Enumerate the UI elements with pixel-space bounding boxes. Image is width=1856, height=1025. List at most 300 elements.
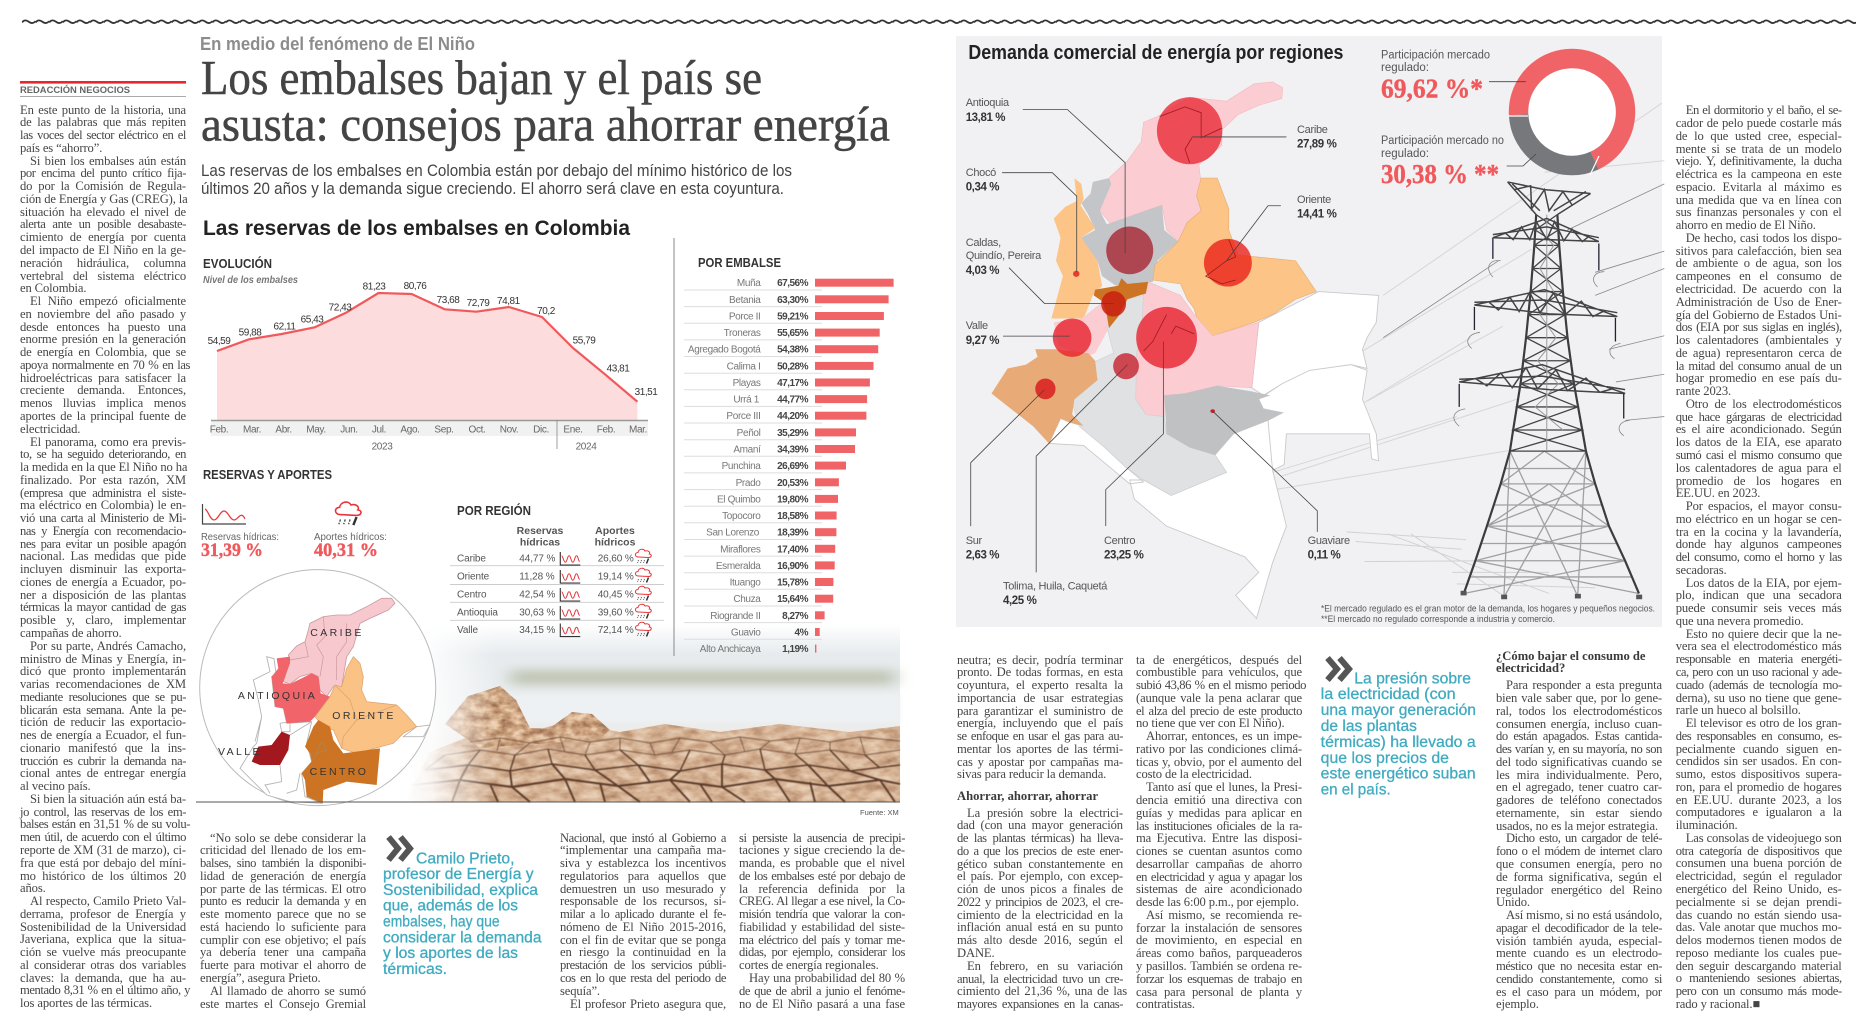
text column 6: desde las 6:00 p.m., por ejemplo. (1136, 895, 1299, 909)
text column 8: plo, indican que una secadora (1676, 588, 1842, 602)
section heading: reservas: Las reservas de los embalses en Colombia (203, 217, 630, 240)
text column 6: las instituciones oficiales de la ra- (1136, 819, 1302, 833)
text column 1: ner a disposición de las plantas (20, 588, 186, 602)
text column 2: está haciendo lo suficiente para (200, 920, 366, 934)
month labels: May. (306, 424, 326, 436)
callout: Camilo Prieto: profesor de Energía y (383, 866, 534, 883)
text column 1: alerta ante un posible desabaste- (20, 217, 186, 231)
text column 8: que hace gárgaras de electricidad (1676, 410, 1842, 424)
bar chart: por embalse: 17,40% (777, 544, 809, 555)
text column 1: Sostenibilidad de la Universidad (20, 920, 186, 934)
month labels (210, 424, 647, 452)
text column 8: iluminación. (1676, 818, 1738, 832)
callout: presión sobre la electricidad: una mayor generación (1321, 702, 1476, 719)
map: Colombia demand (971, 82, 1379, 618)
chart: evolución (203, 256, 658, 452)
text column 8: computadores e igualaron a la (1676, 805, 1842, 819)
text column 5 continued: La presión sobre la electrici- (967, 806, 1123, 820)
text column 6: áreas como baños, parqueaderos (1136, 946, 1302, 960)
map labels: CENTRO (310, 766, 368, 778)
table: por región: 72,14 % (598, 625, 634, 636)
map labels: Centro (1104, 535, 1135, 547)
byline: REDACCIÓN NEGOCIOS (20, 84, 130, 96)
text column 5 continued: do a que los precios de este ener- (957, 844, 1123, 858)
bar chart: por embalse: Ituango (730, 578, 761, 588)
text column 1: neración hidráulica, columna (20, 256, 186, 270)
stat: aportes hídricos: 40,31 % (314, 540, 378, 561)
text column 5: se enfoque en usar el gas para au- (957, 729, 1123, 743)
text column 1: las voces del sector eléctrico en el (20, 128, 186, 142)
text column 8: pecialmente cuando siguen en- (1676, 742, 1842, 756)
text column 1: cional antes de entregar energía (20, 766, 186, 780)
text column 3: demuestren un uso mesurado y (560, 882, 726, 896)
text column 7: apagar el decodificador de la tele- (1496, 921, 1662, 935)
month labels: Feb. (210, 424, 228, 436)
subheading: Cómo bajar el consumo (1496, 649, 1646, 675)
text column 7: fono o el módem de internet claro (1496, 844, 1662, 858)
callout: presión sobre la electricidad: la electricidad (con (1321, 686, 1456, 703)
text column 8: los calentadores (ambientales y (1676, 333, 1842, 347)
text column 4: si persiste la ausencia de precipi- (739, 831, 905, 845)
text column 1: mo histórico de los últimos 20 (20, 869, 186, 883)
table: por región: 44,77 % (519, 554, 556, 565)
text column 8: del consumo, como el horno y las (1676, 550, 1842, 564)
text column 3: cos en lo que resta del periodo de (560, 971, 726, 985)
text column 2: punto es reducir la demanda y en (200, 894, 366, 908)
region: Oriente (315, 657, 417, 753)
text column 1: claves: la demanda, que ha au- (20, 971, 186, 985)
region: Guaviare (1164, 386, 1283, 455)
mast (1464, 215, 1639, 593)
table columns: Reservas (517, 525, 564, 537)
stat: aportes hídricos (314, 531, 387, 561)
text column 8: das. Vale anotar que muchos mo- (1676, 920, 1842, 934)
text column 8: consumen una buena porción de (1676, 856, 1842, 870)
callout: Camilo Prieto (383, 837, 542, 978)
icon: chevrons (1328, 658, 1349, 680)
table columns: Aportes (595, 525, 635, 537)
text column 4: de los embalses esté por debajo de (739, 869, 905, 883)
text column 1: ción de Energía y Gas (CREG), la (20, 192, 188, 206)
text column 6 (1136, 653, 1306, 1011)
bar chart: por embalse: 47,17% (777, 378, 809, 389)
bar chart: por embalse: Chuza (733, 594, 761, 605)
map labels: 4,03 % (966, 265, 999, 277)
subtitle (201, 162, 792, 198)
region: Valle (252, 732, 290, 765)
text column 4: manda, es probable que el nivel (739, 856, 905, 870)
text column 3: regulatorios para aquellos que (560, 869, 726, 883)
text column 8: gía del Gobierno de Estados Uni- (1676, 308, 1842, 322)
text column 6: ticas y, obvio, por el aumento del (1136, 755, 1302, 769)
text column 8: ca, pero con un uso racional y ade- (1676, 665, 1842, 679)
bar chart: por embalse: Punchina (722, 461, 761, 472)
text column 8: electricidad, según el regulador (1676, 869, 1842, 883)
table columns: hídricas (520, 537, 560, 549)
unregulated market share (1381, 135, 1504, 189)
text column 5 continued: ción de unos picos a finales de (957, 882, 1123, 896)
bar chart: por embalse: 8,27% (782, 611, 809, 622)
data labels: 62,11 (273, 322, 296, 332)
bar chart: por embalse: 54,38% (777, 345, 809, 356)
data labels: 31,51 (635, 387, 658, 398)
text column 1: creciente demanda. Entonces, (20, 383, 186, 397)
text column 1: mediante resoluciones que se pu- (20, 690, 186, 704)
month labels: 2023 (372, 442, 393, 452)
month labels: Ago. (400, 424, 420, 436)
text column 1: Si bien la situación aún está ba- (30, 792, 186, 806)
kicker: En medio del fenómeno de El Niño (200, 34, 475, 54)
map labels: ORIENTE (332, 710, 396, 722)
text column 1: electricidad. (20, 422, 80, 436)
bar chart: por embalse: Betania (729, 295, 761, 306)
text column 3 (560, 831, 726, 1011)
bar chart: por embalse: 4% (795, 628, 809, 638)
map labels (218, 627, 396, 778)
bar chart: por embalse (684, 256, 894, 655)
text column 4: cortes de energía regionales. (739, 958, 879, 972)
text column 8: tra en la cocina y la lavandería, (1676, 525, 1842, 539)
text column 4: ma eléctrico del país y tomar me- (739, 933, 905, 947)
white departments (240, 657, 430, 803)
footnotes (1321, 604, 1655, 624)
text column 8: espacio. Evitarla al máximo es (1676, 180, 1842, 194)
text column 1: país es “ahorro”. (20, 141, 102, 155)
bar chart: por embalse: 18,39% (777, 528, 809, 539)
map labels: Antioquia (966, 97, 1010, 109)
text column 6: forzar los esquemas de trabajo en (1136, 972, 1302, 986)
text column 1: cionario manifestó que la ins- (20, 741, 186, 755)
text column 1: jo control, las reservas de los em- (20, 805, 186, 819)
regulated market share: Participación mercado (1381, 49, 1490, 61)
text column 8: en EE.UU. durante 2023, a los (1676, 793, 1842, 807)
text column 1: vertebral del sistema eléctrico (20, 269, 186, 283)
text column 2: balses, sino también la disponibi- (200, 856, 366, 870)
top wavy rule (22, 17, 1856, 27)
text column 4: didas, por ejemplo, considerar los (739, 945, 905, 959)
white departments (1049, 292, 1379, 618)
text column 1: varias recomendaciones de XM (20, 677, 186, 691)
data labels: 73,68 (437, 295, 460, 306)
data labels: 43,81 (607, 364, 630, 374)
text column 7: Dicho esto, un cargador de telé- (1506, 831, 1662, 845)
footnotes: *El mercado regulado es el gran motor de la demanda, los hogares y pequeños negocios. (1321, 604, 1655, 614)
bar chart: por embalse: Agregado Bogotá (688, 345, 761, 356)
text column 1: menos lluvias implica menos (20, 396, 186, 410)
text column 8: De hecho, casi todos los dispo- (1686, 231, 1842, 245)
text column 1: reporte de XM (31 de marzo), ci- (20, 843, 186, 857)
text column 5 continued: 2022 y principios de 2023, el cre- (957, 895, 1123, 909)
table: por región: Oriente (457, 572, 490, 583)
text column 2 (200, 831, 366, 1011)
callout: Camilo Prieto: térmicas. (383, 961, 447, 978)
bar chart: por embalse: Alto Anchicaya (700, 644, 761, 655)
text column 3: El profesor Prieto asegura que, (570, 997, 726, 1011)
table: por región: 39,60 % (598, 608, 634, 619)
callout: presión sobre la electricidad: que los precios de (1321, 750, 1449, 767)
text column 7 (1496, 678, 1662, 1011)
text column 6: el alza del precio de este producto (1136, 704, 1302, 718)
map labels: Chocó (966, 167, 996, 179)
text column 5 continued: inflación anual está en su punto (957, 920, 1123, 934)
text column 1: nes de energía a Ecuador, el fun- (20, 728, 186, 742)
text column 1: incluyen disminuir las exporta- (20, 562, 186, 576)
text column 8: eléctrica es la campeona en este (1676, 167, 1842, 181)
text column 8: cador de pelo puede costarle más (1676, 116, 1842, 130)
table columns: hídricos (595, 537, 636, 549)
text column 7: do están apagados. Estas cantida- (1496, 729, 1662, 743)
region: Antioquia (1081, 178, 1178, 286)
text column 8: viejo. Y, definitivamente, la ducha (1676, 154, 1842, 168)
subtitle: últimos 20 años y la demanda sigue creciendo. El ahorro será clave en esta coyuntura. (201, 180, 784, 198)
text column 8: rante 2023. (1676, 384, 1731, 398)
region: Valle (1054, 302, 1109, 357)
text column 8: ahorro en medio de El Niño. (1676, 218, 1816, 232)
text column 6: Así mismo, se recomienda re- (1146, 908, 1302, 922)
stat: aportes hídricos: Aportes hídricos: (314, 531, 387, 543)
text column 7: mente cuando es un electrodo- (1496, 946, 1662, 960)
demand bubbles (1035, 97, 1252, 413)
text column 6: rativo por las condiciones climá- (1136, 742, 1302, 756)
donut chart (1489, 58, 1626, 175)
text column 8: dos (EIA por sus siglas en inglés), (1676, 320, 1842, 334)
subheading: Cómo bajar el consumo: electricidad? (1496, 661, 1565, 675)
text column 6: Ahorrar, entonces, es un impe- (1146, 729, 1302, 743)
text column 8: sumó casi el mismo consumo que (1676, 448, 1842, 462)
text column 3: “implementar una campaña ma- (560, 843, 726, 857)
bar chart: por embalse: Muña (737, 278, 761, 289)
text column 1: por encima del punto crítico fija- (20, 166, 186, 180)
callout: presión sobre la electricidad: de las plantas (1321, 718, 1417, 735)
bar chart: por embalse: 44,20% (777, 411, 809, 422)
text column 1: blicarán esta semana. Ante la pe- (20, 703, 186, 717)
text column 5: para garantizar el suministro de (957, 704, 1123, 718)
text column 5 (957, 653, 1123, 781)
text column 3: con el fin de evitar que se ponga (560, 933, 726, 947)
text column 1: Por su parte, Andrés Camacho, (30, 639, 186, 653)
text column 8: electricidad. De acuerdo con la (1676, 282, 1842, 296)
bar chart: por embalse: Peñol (737, 428, 761, 439)
text column 5: neutra; es decir, podría terminar (957, 653, 1123, 667)
text column 1: ministro de Minas y Energía, in- (20, 652, 186, 666)
map labels: 0,11 % (1308, 550, 1341, 562)
text column 1: desde entonces ha puesto una (20, 320, 186, 334)
text column 5 continued: más alto desde 2016, según el (957, 933, 1123, 947)
table: por región (450, 503, 664, 637)
text column 5: importancia de usar estrategias (957, 691, 1123, 705)
month labels: 2024 (576, 442, 597, 452)
department borders inside bubbles (1144, 107, 1236, 351)
insulators (1459, 238, 1624, 418)
table: por región: Valle (457, 625, 479, 636)
text column 1: campañas de ahorro. (20, 626, 122, 640)
text column 8: das cuando no están siendo usa- (1676, 908, 1842, 922)
text column 5: cas y apostar por campañas ma- (957, 755, 1123, 769)
region: Antioquia (272, 657, 330, 723)
text column 4: taciones y sigue creciendo la de- (739, 843, 905, 857)
text column 7: visión también ayuda, especial- (1496, 934, 1662, 948)
text column 8: una medida que va en línea con (1676, 193, 1842, 207)
data labels: 70,2 (537, 306, 556, 317)
text column 1: finalizado. Por esta razón, XM (20, 473, 186, 487)
region: Tolima Huila (1072, 295, 1226, 495)
regulated market share: 69,62 %* (1381, 74, 1483, 104)
text column 6: subió 43,86 % en el mismo periodo (1136, 678, 1306, 692)
month labels: Mar. (629, 424, 647, 436)
table: por región: 19,14 % (598, 572, 634, 583)
text column 7: gadores de teléfono conectados (1496, 793, 1662, 807)
text column 3: sequía”. (560, 984, 600, 998)
region: Caribe (283, 598, 395, 697)
icon: rain cloud (336, 502, 361, 525)
callout: presión sobre la electricidad: este energético suban (1321, 766, 1476, 783)
map labels: Oriente (1297, 194, 1331, 206)
map labels: 4,25 % (1003, 595, 1037, 607)
text column 1: enorme presión en la generación (20, 332, 186, 346)
text column 2: “No solo se debe considerar la (210, 831, 366, 845)
text column 1: dicó que pronto implementarán (20, 664, 186, 678)
table heading: POR REGIÓN (457, 503, 531, 518)
callout: Camilo Prieto: embalses, hay que (383, 914, 500, 930)
text column 1: los aportes de las térmicas. (20, 996, 152, 1010)
text column 1: Javeriana, explica que la situa- (20, 932, 186, 946)
text column 5 continued: el país. Por ejemplo, con excep- (957, 869, 1123, 883)
region: Centro pink (1136, 282, 1259, 417)
text column 1: Al respecto, Camilo Prieto Val- (30, 894, 186, 908)
text column 1: El Niño empezó oficialmente (30, 294, 186, 308)
text column 7: usados, no es la mejor estrategia. (1496, 819, 1658, 833)
table: por región: 11,28 % (519, 572, 555, 583)
text column 8: de ambiente o de agua, son los (1676, 256, 1842, 270)
text column 8: cendidos sin ser usados. En con- (1676, 754, 1842, 768)
transmission tower (1346, 182, 1642, 599)
text column 8: sumo, estos dispositivos supera- (1676, 767, 1842, 781)
month labels: Ene. (563, 424, 583, 436)
month labels: Sep. (434, 424, 454, 436)
text column 5: sivas para reducir la demanda. (957, 767, 1106, 781)
map labels: 9,27 % (966, 335, 999, 347)
data labels (208, 281, 658, 398)
text column 6: guías y medidas para aplicar en (1136, 806, 1302, 820)
text column 6: desarrollar campañas de ahorro (1136, 857, 1302, 871)
callout: Camilo Prieto: considerar la demanda (383, 929, 542, 946)
text column 3: nómeno de El Niño 2015-2016, (560, 920, 726, 934)
text column 8: o manteniendo sesiones abiertas, (1676, 971, 1842, 985)
text column 6: dencia emitió una directiva con (1136, 793, 1302, 807)
data labels: 81,23 (363, 282, 386, 292)
bar chart: por embalse: Troneras (724, 328, 761, 339)
data labels: 54,59 (208, 336, 231, 347)
text column 6: combustible para vehículos, que (1136, 665, 1302, 679)
text column 1: derrama, profesor de Energía y (20, 907, 186, 921)
text column 8: des responsables en consumo, es- (1676, 729, 1842, 743)
text column 1: de las palabras que más repiten (20, 115, 186, 129)
text column 7: eternamente, sin estar siendo (1496, 806, 1662, 820)
text column 8: EE.UU. en 2023. (1676, 486, 1760, 500)
month labels: Mar. (243, 424, 261, 436)
month labels: Jul. (372, 424, 386, 436)
text column 2: ya debería tener una campaña (200, 945, 366, 959)
text column 1: al considerar otras dos variables (20, 958, 186, 972)
heading: RESERVAS Y APORTES (203, 467, 332, 482)
text column 8: Los datos de la EIA, por ejem- (1686, 576, 1842, 590)
text column 8: Por espacios, el mayor consu- (1686, 499, 1842, 513)
callout: Camilo Prieto: y los aportes de las (383, 945, 518, 962)
text column 6: forzar la instalación de sensores (1136, 921, 1302, 935)
map labels (966, 97, 1350, 607)
text column 4: CREG. Al llegar a ese nivel, la Co- (739, 894, 905, 908)
region: Oriente (1153, 178, 1316, 336)
stat: reservas hídricas (201, 531, 279, 561)
bar chart: por embalse: 67,56% (777, 278, 809, 289)
text column 8: reposo mediante los cuales pue- (1676, 946, 1842, 960)
text column 5: energía, incluyendo que el país (957, 716, 1123, 730)
map labels: VALLE (218, 746, 262, 758)
footnotes: **El mercado no regulado corresponde a industria y comercio. (1321, 614, 1555, 624)
text column 8: Otro de los electrodomésticos (1686, 397, 1842, 411)
text column 8: ron, para el promedio de hogares (1676, 780, 1842, 794)
text column 1: apoya normalmente en 70 % en las (20, 358, 190, 372)
bar chart: por embalse: Riogrande II (710, 611, 760, 622)
text column 8: otra categoría de dispositivos que (1676, 844, 1842, 858)
text column 3: siva y establezca los incentivos (560, 856, 726, 870)
text column 1: en noviembre del año pasado y (20, 307, 186, 321)
text column 1: aportes de la principal fuente de (20, 409, 186, 423)
text column 4: misión tendría que valorar la con- (739, 907, 905, 921)
text column 5 continued: de las plantas térmicas) ha lleva- (957, 831, 1123, 845)
text column 3: responsable de los recursos, si- (560, 894, 726, 908)
table: por región: 40,45 % (598, 590, 634, 601)
unregulated market share: Participación mercado no (1381, 135, 1504, 147)
map labels: Quindío, Pereira (966, 250, 1042, 262)
map labels: 13,81 % (966, 112, 1005, 124)
text column 1: men útil, de acuerdo con el último (20, 830, 186, 844)
text column 3: en riesgo la continuidad en la (560, 945, 726, 959)
power lines (1273, 103, 1664, 490)
title (201, 50, 890, 152)
text column 7: Así mismo, si no está usándolo, (1506, 908, 1662, 922)
text column 1: balses están en 31,51 % de su volu- (20, 817, 190, 831)
table columns (517, 525, 636, 549)
unregulated market share: 30,38 % ** (1381, 159, 1499, 189)
callout: Camilo Prieto: que, además de los (383, 898, 518, 915)
text column 7: consumen energía, incluso cuan- (1496, 717, 1662, 731)
text column 8: es el aire acondicionado. Según (1676, 422, 1842, 436)
map labels: Valle (966, 320, 988, 332)
callout: presión sobre la electricidad (1321, 658, 1476, 799)
month labels: Nov. (500, 424, 518, 436)
text column 8: secadoras. (1676, 563, 1727, 577)
bar chart: por embalse: Playas (733, 378, 761, 389)
text column 6: de movimiento, en especial en (1136, 933, 1302, 947)
text column 8: de agua) representaron cerca de (1676, 346, 1842, 360)
bar chart: por embalse: Urrá 1 (733, 395, 760, 406)
text column 8: de lo que usted cree, especial- (1676, 129, 1842, 143)
bar chart: por embalse: Calima I (727, 361, 760, 372)
bar chart: por embalse: 20,53% (777, 478, 809, 489)
line series (217, 293, 637, 402)
map labels: 0,34 % (966, 181, 999, 193)
text column 8 (1676, 103, 1842, 1011)
text column 5 continued: En febrero, en su variación (967, 959, 1123, 973)
bar chart: por embalse: 15,78% (777, 578, 809, 588)
text column 1: (empresa que administra el siste- (20, 486, 186, 500)
bar chart: por embalse: 26,69% (777, 461, 809, 472)
text column 8: den seguir descargando material (1676, 959, 1842, 973)
callout: presión sobre la electricidad: térmicas) ha llevado a (1321, 734, 1476, 751)
data labels: 55,79 (573, 336, 596, 346)
text column 7: regulador energético del Reino (1496, 883, 1662, 897)
